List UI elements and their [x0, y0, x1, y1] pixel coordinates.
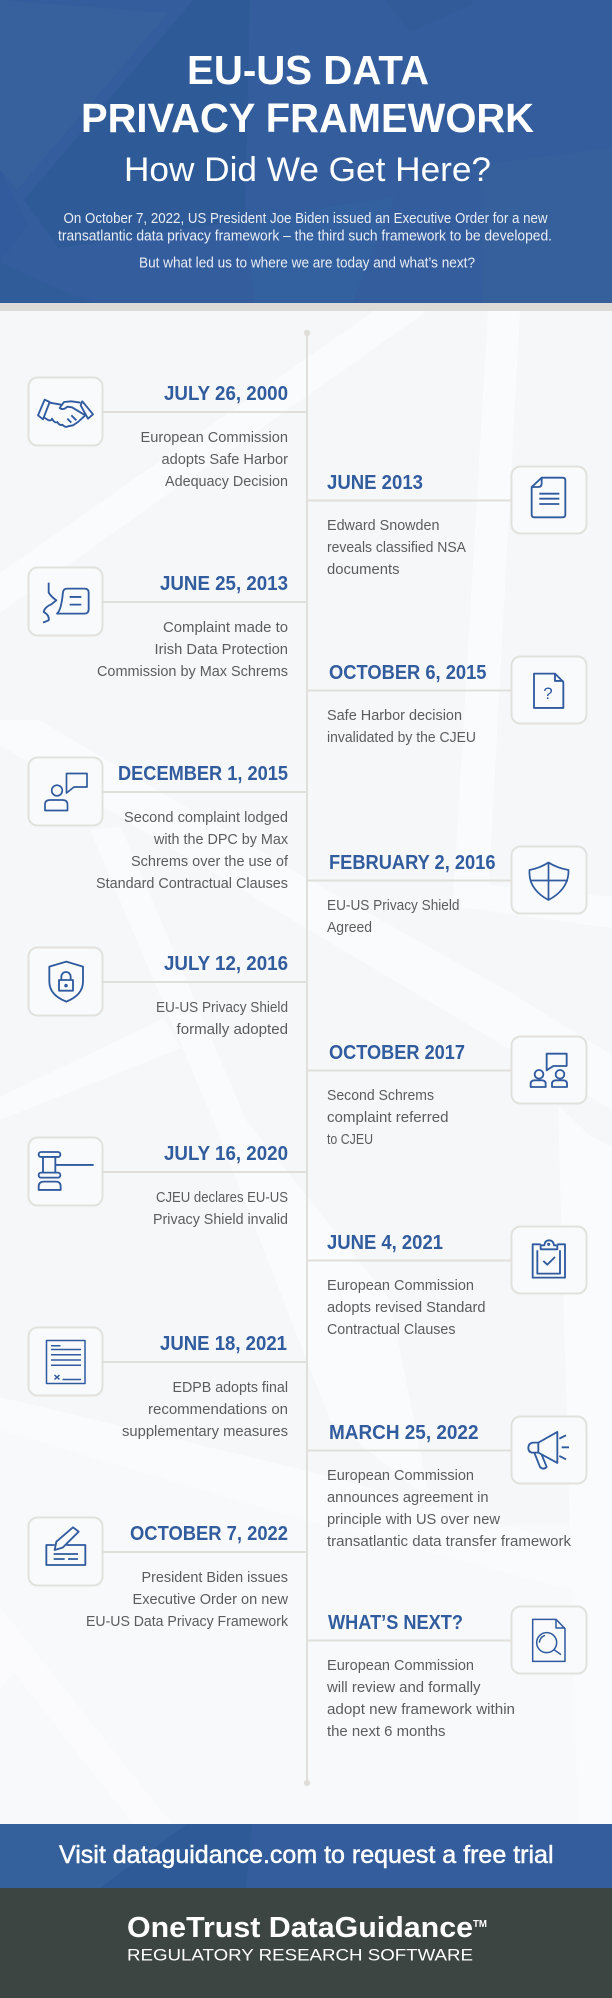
description: transatlantic data transfer framework	[327, 1533, 571, 1550]
description	[327, 1087, 448, 1148]
date: FEBRUARY 2, 2016	[329, 852, 496, 874]
description: European Commission	[327, 1657, 474, 1674]
description: CJEU declares EU-US	[156, 1189, 288, 1206]
description: Standard Contractual Clauses	[96, 875, 288, 892]
title: PRIVACY FRAMEWORK	[81, 95, 534, 141]
title: EU-US DATA	[187, 47, 429, 93]
icon: signing pen	[28, 1518, 102, 1586]
description	[156, 999, 288, 1038]
date: JULY 16, 2020	[164, 1143, 288, 1165]
description: Adequacy Decision	[165, 473, 288, 490]
description: Privacy Shield invalid	[153, 1211, 288, 1228]
timeline spine	[304, 330, 310, 1786]
icon: question document	[512, 656, 586, 724]
event: July 16, 2020	[28, 1138, 307, 1228]
description: adopt new framework within	[327, 1701, 515, 1718]
description	[327, 897, 460, 936]
intro text: On October 7, 2022, US President Joe Biden issued an Executive Order for a new	[64, 210, 548, 227]
call to action band: Visit dataguidance.com to request a free trial	[59, 1841, 554, 1869]
description: EU-US Data Privacy Framework	[86, 1613, 288, 1630]
icon: shield with lock	[28, 948, 102, 1016]
intro text: But what led us to where we are today and what’s next?	[139, 254, 475, 272]
date: JUNE 4, 2021	[327, 1232, 443, 1254]
date: JUNE 2013	[327, 472, 423, 494]
description: reveals classified NSA	[327, 539, 466, 556]
description: will review and formally	[326, 1679, 481, 1696]
description: Contractual Clauses	[327, 1321, 456, 1338]
date: DECEMBER 1, 2015	[118, 763, 288, 785]
icon: clipboard with check	[512, 1226, 586, 1294]
event: June 2013	[307, 466, 586, 578]
icon: document	[512, 466, 586, 534]
date: JULY 12, 2016	[164, 953, 288, 975]
description: recommendations on	[148, 1401, 288, 1418]
subtitle: How Did We Get Here?	[124, 151, 491, 189]
event: October 6, 2015	[307, 656, 586, 746]
description: complaint referred	[327, 1109, 448, 1126]
icon: handshake	[28, 378, 102, 446]
description: EDPB adopts final	[172, 1379, 288, 1396]
icon: person with speech bubble	[28, 758, 102, 826]
description	[326, 1657, 515, 1740]
icon: signed form	[28, 1328, 102, 1396]
description	[153, 1189, 288, 1228]
header panel	[0, 0, 612, 303]
footer logo	[0, 1888, 612, 1998]
description	[122, 1379, 288, 1440]
description: to CJEU	[327, 1131, 373, 1148]
description: announces agreement in	[327, 1489, 488, 1506]
description: principle with US over new	[327, 1511, 500, 1528]
icon: two people with speech bubble	[512, 1036, 586, 1104]
event: October 7, 2022	[28, 1518, 307, 1630]
icon: shield	[512, 846, 586, 914]
description: Second Schrems	[327, 1087, 434, 1104]
description: President Biden issues	[142, 1569, 288, 1586]
event: June 18, 2021	[28, 1328, 307, 1440]
date: OCTOBER 6, 2015	[329, 662, 486, 684]
icon: megaphone	[512, 1416, 586, 1484]
description	[96, 809, 289, 892]
description: formally adopted	[176, 1021, 288, 1038]
description: invalidated by the CJEU	[327, 729, 476, 746]
description	[97, 619, 288, 680]
description: with the DPC by Max	[153, 831, 288, 848]
description: Schrems over the use of	[131, 853, 289, 870]
description: EU-US Privacy Shield	[327, 897, 460, 914]
description: EU-US Privacy Shield	[156, 999, 288, 1016]
icon: document with magnifier	[512, 1606, 586, 1674]
event: June 25, 2013	[28, 568, 307, 680]
description: supplementary measures	[122, 1423, 288, 1440]
date: JULY 26, 2000	[164, 383, 288, 405]
intro text	[58, 210, 552, 272]
description: Agreed	[327, 919, 372, 936]
footer logo: REGULATORY RESEARCH SOFTWARE	[127, 1946, 473, 1964]
description: Complaint made to	[163, 619, 288, 636]
description: Safe Harbor decision	[327, 707, 462, 724]
description: European Commission	[327, 1467, 474, 1484]
description	[327, 1467, 571, 1550]
description: European Commission	[327, 1277, 474, 1294]
description: Commission by Max Schrems	[97, 663, 288, 680]
description	[140, 429, 288, 490]
date: MARCH 25, 2022	[329, 1422, 478, 1444]
description: the next 6 months	[327, 1723, 446, 1740]
event: February 2, 2016	[307, 846, 586, 936]
event: July 26, 2000	[28, 378, 307, 490]
footer logo: OneTrust DataGuidance	[127, 1912, 473, 1944]
description	[86, 1569, 288, 1630]
event: December 1, 2015	[28, 758, 307, 892]
description: documents	[327, 561, 400, 578]
event: What's next	[307, 1606, 586, 1740]
title	[81, 47, 534, 141]
description: Edward Snowden	[327, 517, 440, 534]
date: OCTOBER 2017	[329, 1042, 465, 1064]
description: Second complaint lodged	[124, 809, 288, 826]
icon: question document: ?	[543, 684, 553, 703]
description: adopts Safe Harbor	[162, 451, 288, 468]
date: JUNE 25, 2013	[160, 573, 288, 595]
icon: gavel	[28, 1138, 102, 1206]
description	[327, 517, 466, 578]
description: Executive Order on new	[132, 1591, 288, 1608]
event: March 25, 2022	[307, 1416, 586, 1550]
description: adopts revised Standard	[327, 1299, 486, 1316]
intro text: transatlantic data privacy framework – the third such framework to be developed.	[58, 228, 552, 244]
event: October 2017	[307, 1036, 586, 1148]
description	[327, 1277, 486, 1338]
date: OCTOBER 7, 2022	[130, 1523, 288, 1545]
description: Irish Data Protection	[154, 641, 288, 658]
footer logo: TM	[473, 1919, 487, 1930]
call to action band	[0, 1824, 612, 1888]
event: July 12, 2016	[28, 948, 307, 1038]
date: WHAT’S NEXT?	[328, 1612, 463, 1634]
date: JUNE 18, 2021	[160, 1333, 287, 1355]
description: European Commission	[140, 429, 288, 446]
description	[327, 707, 476, 746]
icon: speech	[28, 568, 102, 636]
event: June 4, 2021	[307, 1226, 586, 1338]
